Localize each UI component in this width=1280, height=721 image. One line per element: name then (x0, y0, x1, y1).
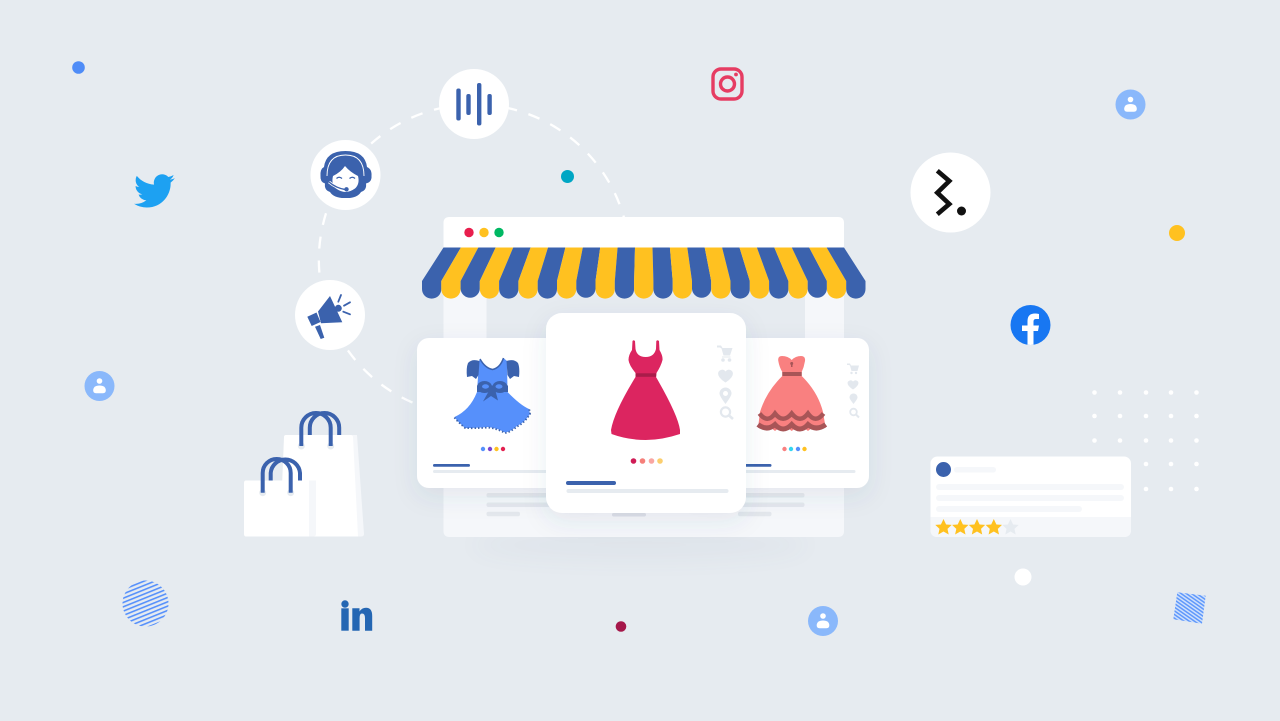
user avatar: left (84, 371, 114, 401)
icon: instagram (713, 69, 742, 99)
decorative dots (72, 61, 1185, 632)
pink dress (611, 340, 680, 440)
product card: pink dress (546, 313, 746, 513)
shopping bags (244, 413, 364, 536)
striped circle (122, 580, 168, 626)
icon: twitter (134, 174, 175, 207)
icon: facebook (1010, 305, 1050, 346)
striped square (1173, 592, 1206, 624)
illustration: online store with social icons (72, 61, 1206, 636)
dashed arc (319, 104, 624, 403)
colour swatches (782, 447, 807, 451)
star rating (935, 519, 1019, 534)
icon: brand logo (910, 152, 990, 232)
product card: blue dress (417, 338, 597, 488)
store shadow (470, 529, 810, 561)
coral dress (758, 356, 826, 431)
awning (422, 248, 866, 299)
browser storefront window (444, 217, 844, 537)
icon: voice waveform (439, 69, 509, 139)
large bag (280, 413, 364, 536)
dot grid (1092, 390, 1199, 491)
window control dots (464, 228, 504, 237)
user avatar: top right (1116, 90, 1146, 120)
small bag (244, 459, 316, 536)
icon: megaphone (295, 280, 365, 350)
user avatar: bottom (808, 606, 838, 636)
colour swatches (481, 447, 505, 451)
action icons (847, 364, 859, 418)
review card (930, 456, 1131, 537)
product card: coral dress (690, 338, 869, 488)
icon: linkedin (341, 600, 372, 631)
colour swatches (631, 458, 663, 464)
icon: support agent (310, 140, 380, 210)
action icons (717, 346, 733, 419)
blue dress (454, 358, 530, 433)
